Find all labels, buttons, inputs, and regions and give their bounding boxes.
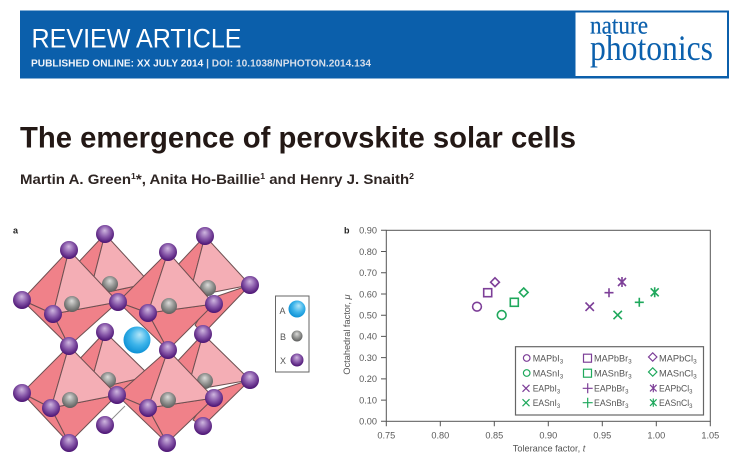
- legend row: MA tin group: [523, 368, 697, 381]
- legend row: EA tin group: EASnI: [533, 398, 559, 408]
- x axis title: Tolerance factor, t: [513, 443, 586, 453]
- authors: 1: [131, 172, 136, 181]
- legend row: EA lead group: EAPbBr: [594, 384, 627, 394]
- legend row: MA lead group: [523, 353, 697, 366]
- legend row: MA lead group: 3: [560, 359, 564, 366]
- authors: and Henry J. Snaith: [265, 172, 409, 187]
- header banner: [20, 10, 729, 78]
- legend row: EA lead group: EAPbCl: [659, 384, 692, 394]
- y axis title: Octahedral factor, μ: [342, 294, 352, 375]
- x axis labels: 0.85: [485, 430, 503, 440]
- back octahedra: [58, 234, 250, 426]
- y axis labels: 0.40: [359, 332, 377, 342]
- atom key: B: [280, 332, 286, 342]
- y axis labels: [359, 226, 377, 427]
- legend row: EA tin group: EASnBr: [594, 398, 627, 408]
- authors: Martin A. Green: [20, 172, 122, 187]
- legend row: EA tin group: 3: [557, 403, 561, 410]
- legend row: EA lead group: 3: [689, 389, 693, 396]
- x axis labels: 0.95: [593, 430, 611, 440]
- front B atoms: [62, 296, 177, 408]
- x axis labels: 0.75: [377, 430, 395, 440]
- legend row: EA lead group: [522, 383, 693, 396]
- x axis labels: 1.05: [701, 430, 719, 440]
- legend row: EA lead group: EAPbI: [533, 384, 559, 394]
- chart legend: [516, 347, 704, 415]
- article title: The emergence of perovskite solar cells: [20, 122, 576, 154]
- x axis labels: 0.90: [539, 430, 557, 440]
- atom key: X: [280, 356, 286, 366]
- back B atoms: [100, 276, 216, 389]
- legend row: MA lead group: 3: [628, 359, 632, 366]
- legend row: MA lead group: MAPbBr: [594, 354, 629, 364]
- panel a: perovskite crystal structure: [13, 225, 309, 452]
- y axis labels: 0.70: [359, 268, 377, 278]
- journal logo: nature: [590, 12, 648, 39]
- authors: 1: [260, 172, 266, 181]
- atom key: [276, 296, 309, 372]
- y axis labels: 0.80: [359, 247, 377, 257]
- central A atom: [124, 326, 150, 354]
- atom key: A: [280, 306, 286, 316]
- heading: review article: REVIEW ARTICLE: [32, 23, 242, 53]
- legend row: MA tin group: 3: [560, 374, 564, 381]
- panel label a: a: [13, 225, 19, 235]
- legend row: EA tin group: 3: [625, 403, 629, 410]
- y axis labels: 0.60: [359, 289, 377, 299]
- lower front octahedra: [22, 346, 214, 443]
- legend row: EA tin group: EASnCl: [659, 398, 692, 408]
- data markers: [473, 277, 659, 319]
- y axis labels: 0.30: [359, 353, 377, 363]
- panel b: scatter chart: [342, 225, 719, 453]
- legend row: EA tin group: [522, 398, 693, 410]
- publication line: PUBLISHED ONLINE: XX JULY 2014 | DOI: 10.1038/NPHOTON.2014.134: [31, 58, 371, 70]
- legend row: MA lead group: MAPbCl: [659, 354, 693, 364]
- x axis labels: 1.00: [647, 430, 665, 440]
- y axis labels: 0.10: [359, 395, 377, 405]
- legend row: EA tin group: 3: [689, 403, 693, 410]
- legend row: MA tin group: MASnBr: [594, 369, 629, 379]
- authors: *, Anita Ho-Baillie: [136, 172, 261, 187]
- X atoms: [13, 225, 259, 452]
- legend row: MA tin group: MASnI: [533, 369, 561, 379]
- legend row: MA lead group: 3: [693, 359, 697, 366]
- x axis labels: [377, 430, 719, 440]
- authors: 2: [409, 172, 415, 181]
- legend row: EA lead group: 3: [557, 389, 561, 396]
- plot frame and ticks: [381, 230, 710, 426]
- x axis labels: 0.80: [431, 430, 449, 440]
- y axis labels: 0.00: [359, 417, 377, 427]
- y axis labels: 0.50: [359, 310, 377, 320]
- y axis labels: 0.20: [359, 374, 377, 384]
- y axis labels: 0.90: [359, 226, 377, 236]
- legend row: EA lead group: 3: [625, 389, 629, 396]
- journal logo: photonics: [590, 28, 713, 68]
- legend row: MA tin group: 3: [628, 374, 632, 381]
- journal logo: [576, 12, 727, 76]
- upper front octahedra: [22, 250, 214, 350]
- legend row: MA tin group: 3: [693, 374, 697, 381]
- legend row: MA tin group: MASnCl: [659, 369, 693, 379]
- panel label b: b: [344, 225, 350, 235]
- legend row: MA lead group: MAPbI: [533, 354, 561, 364]
